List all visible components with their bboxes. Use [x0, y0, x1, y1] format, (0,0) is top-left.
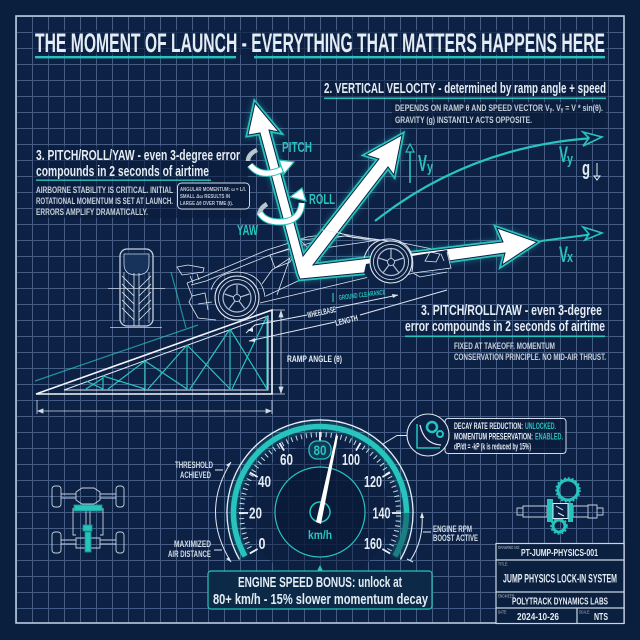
date: DATE:	[498, 610, 507, 614]
car blueprint rear	[177, 233, 447, 320]
panel: pitch roll yaw left text: ROTATIONAL MOMENTUM IS SET AT LAUNCH.	[36, 196, 173, 207]
arrows: launch velocity vectors	[248, 103, 537, 279]
truss members	[86, 316, 267, 389]
callout: engine speed bonus	[208, 565, 432, 609]
icon: gearbox right	[517, 478, 603, 534]
speed labels: 140	[372, 506, 391, 522]
swirl arrows	[237, 140, 335, 239]
threshold annotation: ACHIEVED	[180, 470, 211, 481]
scale: SCALE:	[579, 610, 590, 614]
scale	[579, 610, 608, 623]
drawing number: PT-JUMP-PHYSICS-001	[521, 547, 598, 559]
angular momentum note	[178, 183, 250, 209]
arrow: vy short: y	[427, 159, 433, 176]
scale: NTS	[594, 611, 608, 623]
drawing title	[498, 562, 617, 586]
panel: pitch roll yaw left text: ERRORS AMPLIFY DRAMATICALLY.	[36, 207, 148, 218]
minor ticks	[242, 435, 398, 552]
car blueprint front	[322, 230, 452, 284]
panel: decay rate: MOMENTUM PRESERVATION:	[454, 432, 533, 442]
arrow: trajectory curve: y	[567, 151, 573, 168]
speed labels: 40	[258, 474, 271, 491]
threshold annotation	[175, 460, 231, 562]
arrow: vy short	[406, 144, 433, 183]
speed labels: 20	[249, 506, 262, 522]
panel: vertical velocity text	[322, 80, 608, 128]
speed labels: 0	[258, 536, 266, 553]
gravity label: g	[582, 158, 590, 180]
arrow: trajectory curve: V	[559, 142, 568, 167]
panel: pitch roll yaw left text: AIRBORNE STABILITY IS CRITICAL. INITIAL	[36, 185, 173, 196]
inner dial	[275, 467, 365, 557]
speed band	[234, 426, 406, 556]
panel: decay rate: ENABLED.	[535, 432, 563, 442]
icon: decay curve and gears	[407, 414, 449, 456]
speedometer gauge	[227, 420, 413, 582]
icon: rear wheel	[215, 276, 259, 320]
car dimension callouts	[246, 289, 447, 342]
arrow: vx	[541, 227, 602, 267]
panel: pitch roll yaw right text	[405, 303, 606, 363]
major ticks	[239, 432, 401, 554]
engineer	[498, 594, 608, 608]
icon: drivetrain left	[52, 486, 124, 553]
unit label: km/h	[308, 528, 332, 542]
needle	[316, 435, 338, 524]
80 threshold pill	[309, 441, 331, 459]
drawing number: DRAWING NO:	[498, 545, 520, 550]
arrow: vy short: V	[418, 150, 427, 176]
height dimension	[272, 310, 285, 394]
roll label: ROLL	[309, 192, 335, 208]
length dimension: LENGTH	[334, 313, 359, 328]
speed labels	[249, 452, 391, 553]
panel: pitch roll yaw left text: 3. PITCH/ROLL/YAW - even 3-degree error	[36, 148, 240, 164]
threshold annotation: THRESHOLD	[175, 460, 213, 471]
engine rpm annotation: BOOST ACTIVE	[433, 533, 478, 544]
maximized annotation: AIR DISTANCE	[168, 549, 211, 560]
panel: pitch roll yaw left text: compounds in 2 seconds of airtime	[36, 164, 209, 180]
panel: vertical velocity text: GRAVITY (g) INSTANTLY ACTS OPPOSITE.	[395, 115, 532, 126]
engine rpm annotation	[407, 512, 478, 562]
drawing title: TITLE:	[498, 562, 508, 566]
roll rotation arrow	[260, 188, 306, 222]
callout: engine speed bonus: 80+ km/h - 15% slower momentum decay	[213, 591, 428, 608]
angular momentum note: ANGULAR MOMENTUM: ω = L/I.	[180, 187, 246, 193]
engine rpm annotation: ENGINE RPM	[433, 524, 472, 535]
pitch label: PITCH	[282, 140, 312, 156]
maximized annotation	[168, 539, 222, 560]
ramp with truss	[35, 272, 342, 414]
maximized annotation: MAXIMIZED	[174, 539, 211, 550]
yaw label: YAW	[237, 223, 258, 239]
outer rim	[227, 420, 413, 560]
speed labels: 160	[364, 536, 382, 553]
drawing number	[498, 545, 598, 559]
ground clearance label: GROUND CLEARANCE	[338, 289, 386, 302]
panel: pitch roll yaw right text: FIXED AT TAKEOFF. MOMENTUM	[454, 341, 555, 352]
ramp angle label: RAMP ANGLE (θ)	[287, 354, 342, 365]
date: 2024-10-26	[517, 611, 559, 623]
pitch rotation arrow	[250, 160, 294, 174]
panel: pitch roll yaw left text	[33, 146, 250, 218]
angular momentum note: SMALL Δω RESULTS IN	[180, 194, 230, 200]
wheelbase dimension	[246, 294, 398, 333]
callout: engine speed bonus: ENGINE SPEED BONUS: unlock at	[238, 574, 402, 591]
speed labels: 120	[364, 474, 382, 491]
panel: decay rate: UNLOCKED.	[525, 421, 556, 431]
arrow: vx: V	[559, 242, 568, 267]
speed labels: 100	[342, 452, 360, 469]
panel: decay rate: dP/dt = -kP (k is reduced by 15%)	[454, 442, 531, 452]
engineer: ENGINEER:	[498, 594, 515, 598]
speed labels: 60	[280, 452, 293, 469]
date	[498, 610, 559, 623]
gravity label	[582, 158, 600, 180]
80 threshold pill: 80	[314, 442, 327, 458]
wheelbase dimension: WHEELBASE	[306, 304, 337, 320]
angular momentum note: LARGE Δθ OVER TIME (t).	[180, 201, 233, 207]
panel: decay rate	[383, 414, 566, 456]
icon: front wheel	[370, 241, 412, 283]
panel: decay rate: DECAY RATE REDUCTION:	[454, 421, 523, 431]
arrow: pitch roll yaw rotation back loops	[248, 150, 267, 215]
arrow: vx: x	[567, 249, 573, 266]
icon: tire tread	[108, 249, 165, 328]
width dimension	[37, 400, 272, 414]
length dimension	[247, 290, 447, 342]
arrow: trajectory curve	[375, 132, 602, 221]
title block	[496, 544, 624, 624]
